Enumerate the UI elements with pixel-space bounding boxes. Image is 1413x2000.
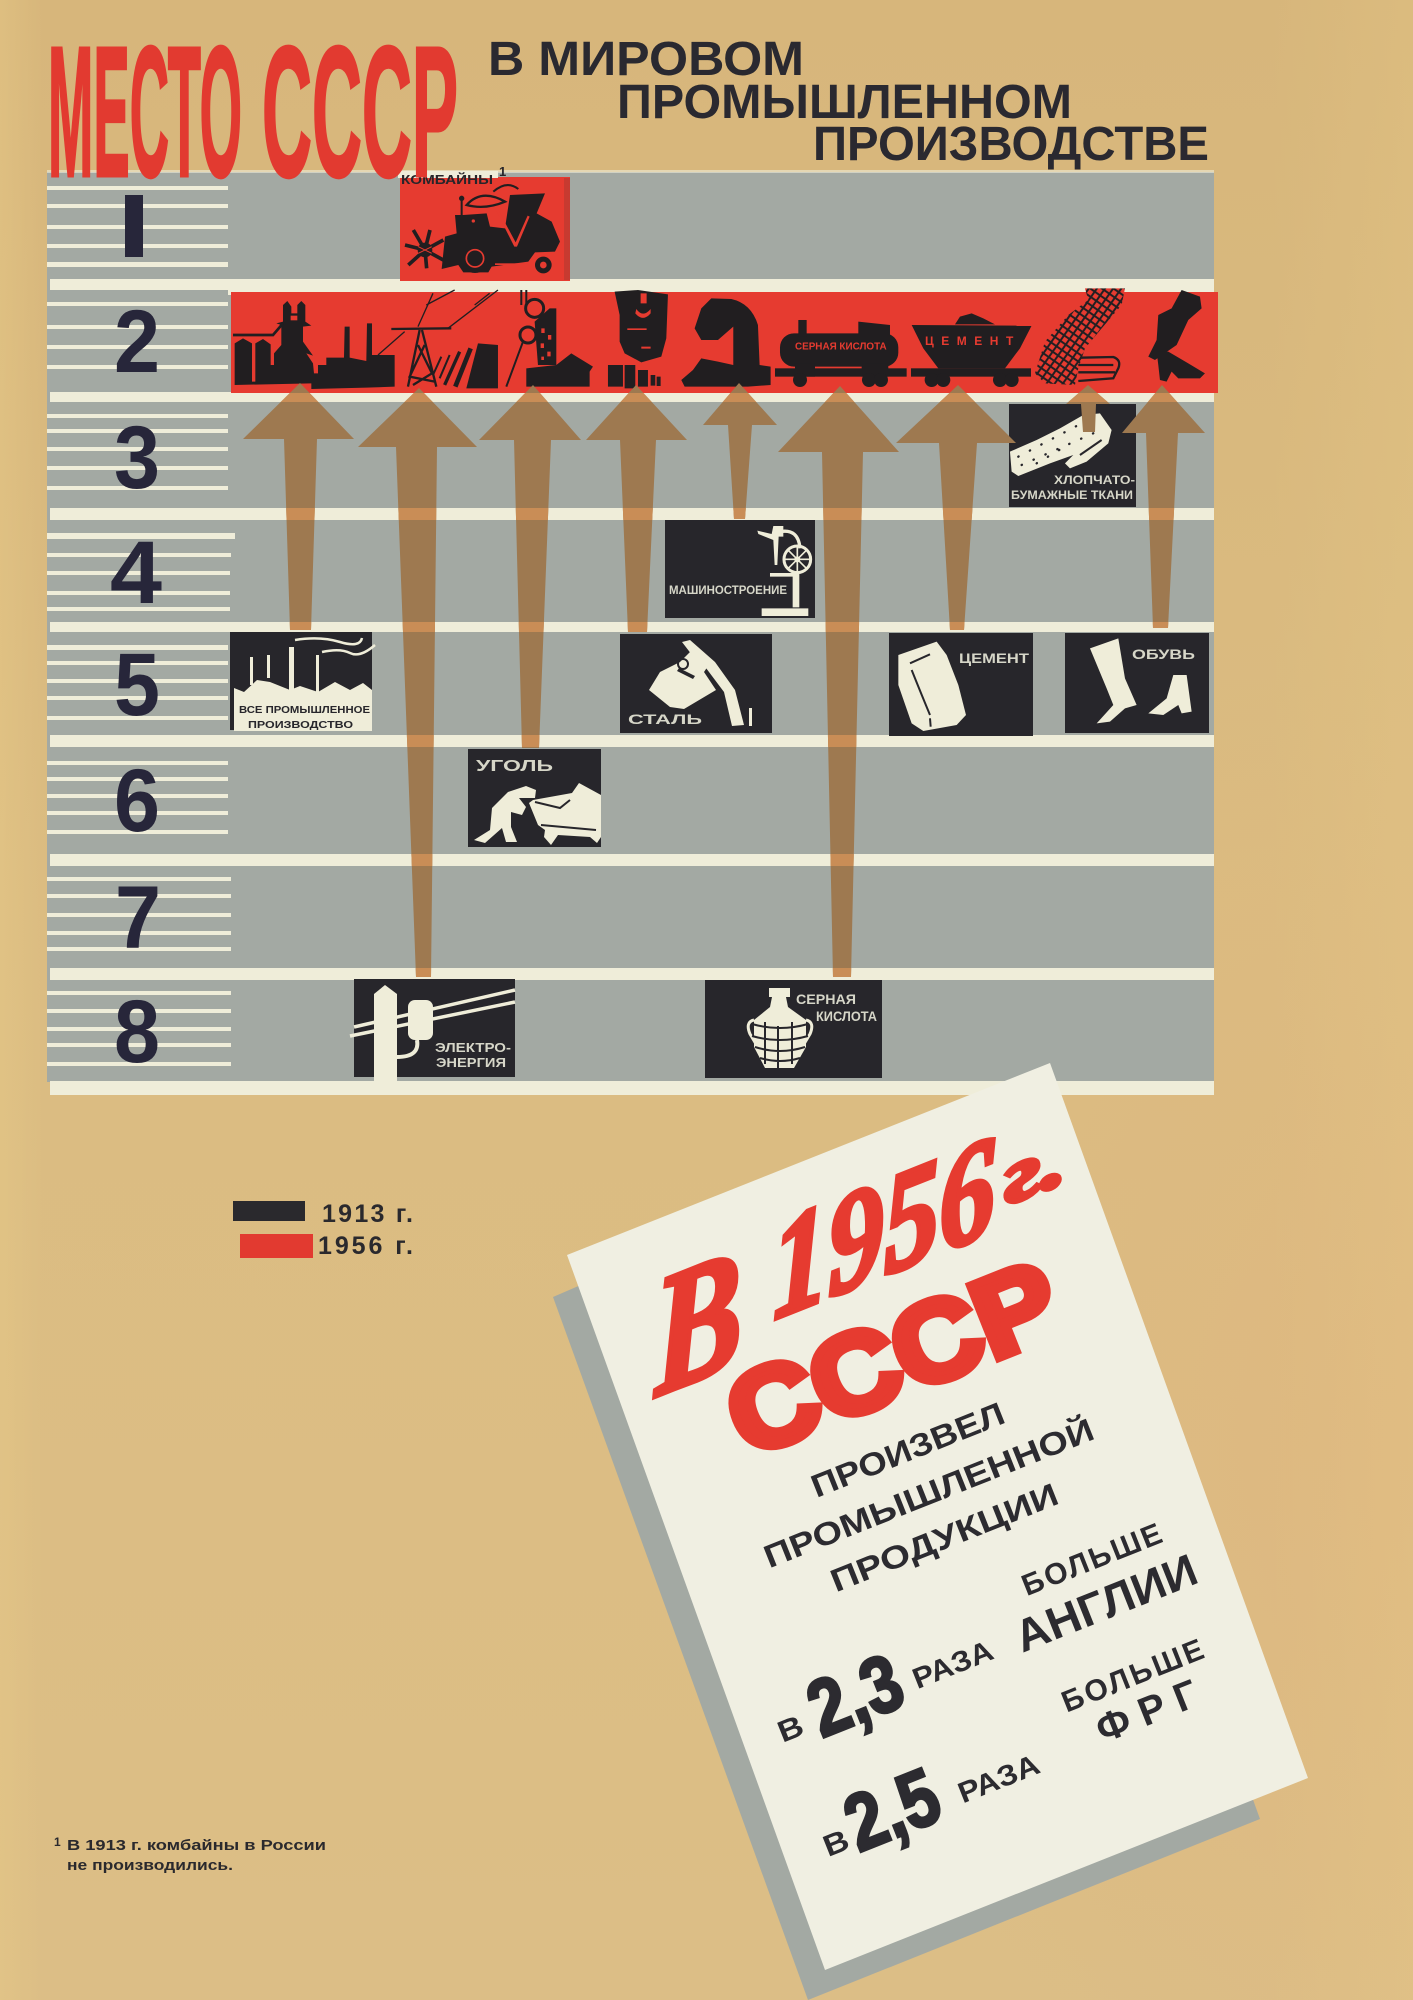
rank scale ticks bbox=[47, 186, 235, 1066]
body: produced industrial output: ПРОДУКЦИИ bbox=[825, 1476, 1063, 1599]
icon: factory and blast furnace bbox=[233, 301, 395, 389]
icon: cotton fabric bbox=[1010, 413, 1112, 476]
label: cotton fabrics bbox=[1011, 475, 1135, 502]
label: cotton fabrics: ХЛОПЧАТО- bbox=[1054, 475, 1135, 487]
icon: ladle pouring steel bbox=[649, 640, 752, 726]
footnote: В 1913 г. комбайны в России bbox=[67, 1838, 326, 1854]
icon: factory skyline bbox=[234, 638, 375, 731]
heading: in 1956 bbox=[588, 1085, 1110, 1434]
icon: cement hopper wagon bbox=[911, 313, 1032, 387]
chart panel bbox=[47, 164, 1218, 1095]
icon: boot and shoe bbox=[1090, 638, 1192, 723]
title: black part bbox=[488, 33, 1209, 171]
red band: rank 2 in 1956 bbox=[231, 288, 1218, 393]
icon: coal mine headframe bbox=[506, 290, 593, 387]
title: black part: ПРОМЫШЛЕННОМ bbox=[617, 76, 1072, 129]
horizontal row separators bbox=[47, 170, 1214, 1095]
arrow: footwear 5 to 2 bbox=[1122, 385, 1205, 628]
comparison: England: БОЛЬШЕ bbox=[1017, 1517, 1167, 1603]
footnote: 1 bbox=[54, 1835, 61, 1849]
rank numbers: 3 bbox=[114, 407, 160, 507]
label: coal: УГОЛЬ bbox=[476, 758, 553, 775]
icon: glass carboy bbox=[748, 988, 812, 1068]
label: all industry: ПРОИЗВОДСТВО bbox=[248, 719, 353, 731]
card text bbox=[588, 1085, 1288, 1881]
label: cotton fabrics: БУМАЖНЫЕ ТКАНИ bbox=[1011, 490, 1133, 502]
title: black part: ПРОИЗВОДСТВЕ bbox=[813, 118, 1209, 171]
chart grey field bbox=[47, 172, 1214, 1082]
box: steel, rank 5 bbox=[620, 634, 772, 733]
comparison: England bbox=[756, 1510, 1209, 1768]
comparison: West Germany: В bbox=[819, 1824, 854, 1864]
label: steel: СТАЛЬ bbox=[628, 711, 702, 727]
rank numbers bbox=[110, 195, 163, 1081]
arrow: coal 6 to 2 bbox=[479, 385, 581, 748]
comparison: West Germany bbox=[802, 1633, 1232, 1879]
legend: 1913: 1913 г. bbox=[322, 1200, 413, 1228]
rank numbers: 2 bbox=[114, 291, 160, 391]
icon: power pole and wires bbox=[350, 985, 515, 1095]
label: all industry bbox=[239, 704, 370, 731]
label: all industry: ВСЕ ПРОМЫШЛЕННОЕ bbox=[239, 704, 370, 716]
rank numbers: 6 bbox=[114, 750, 160, 850]
text on hopper: ЦЕМЕНТ bbox=[925, 334, 1014, 348]
body: produced industrial output bbox=[741, 1367, 1116, 1619]
footnote: не производились. bbox=[67, 1858, 233, 1874]
body: produced industrial output: ПРОИЗВЕЛ bbox=[806, 1395, 1010, 1504]
box: combines, rank 1 bbox=[398, 164, 570, 281]
title bbox=[48, 9, 1209, 216]
title: red part bbox=[48, 9, 458, 216]
label: footwear: ОБУВЬ bbox=[1132, 646, 1195, 662]
icon: power pylon and dam bbox=[378, 290, 498, 388]
comparison: West Germany: ФРГ bbox=[1090, 1672, 1204, 1752]
legend bbox=[233, 1200, 413, 1260]
label: electricity: ЭЛЕКТРО- bbox=[435, 1041, 511, 1055]
heading: in 1956: 1956 bbox=[770, 1105, 998, 1350]
title: red part: МЕСТО bbox=[48, 9, 242, 216]
label: electricity: ЭНЕРГИЯ bbox=[436, 1056, 506, 1070]
rank numbers: 4 bbox=[110, 522, 163, 622]
arrow: machine building 4 to 2 bbox=[703, 383, 777, 519]
footnote bbox=[54, 1835, 326, 1874]
card: 1956 comparison bbox=[553, 1063, 1308, 2000]
arrow: textiles 3 to 2 bbox=[1066, 385, 1110, 432]
icon: machine tool bbox=[681, 298, 771, 387]
icon: combine harvester bbox=[405, 185, 560, 273]
comparison: West Germany: РАЗА bbox=[954, 1749, 1044, 1810]
heading: in 1956: г. bbox=[996, 1116, 1070, 1220]
comparison: West Germany: БОЛЬШЕ bbox=[1057, 1633, 1209, 1719]
arrow: electricity 8 to 2 bbox=[358, 388, 477, 977]
comparison: England: РАЗА bbox=[908, 1635, 998, 1696]
heading: in 1956: В bbox=[649, 1210, 745, 1434]
box: cement, rank 5 bbox=[889, 633, 1033, 736]
box: footwear, rank 5 bbox=[1065, 633, 1209, 733]
label: sulphuric acid: КИСЛОТА bbox=[816, 1008, 877, 1024]
rank numbers: 5 bbox=[114, 634, 160, 734]
icon: sulphuric acid tank wagon bbox=[775, 320, 907, 387]
rank numbers: 8 bbox=[114, 981, 160, 1081]
comparison: West Germany: 2,5 bbox=[832, 1751, 952, 1868]
box: coal, rank 6 bbox=[468, 749, 601, 847]
icon: miner with cart bbox=[474, 783, 601, 845]
icon: textile roll bbox=[1035, 288, 1125, 385]
title: СССР bbox=[262, 9, 458, 216]
arrows: rank change 1913 to 1956 bbox=[243, 383, 1205, 977]
icon: machine tool bbox=[757, 526, 811, 616]
rank numbers: 7 bbox=[115, 867, 161, 967]
label: cement: ЦЕМЕНТ bbox=[959, 650, 1030, 666]
label: combines: КОМБАЙНЫ bbox=[401, 172, 493, 187]
arrow overlaps on white lines bbox=[243, 383, 1205, 977]
label: sulphuric acid: СЕРНАЯ bbox=[796, 991, 856, 1007]
arrow: all industry 5 to 2 bbox=[243, 383, 354, 630]
box: all industrial production, rank 5 bbox=[230, 632, 375, 731]
box: electricity, rank 8 bbox=[350, 979, 515, 1095]
title: black part: В МИРОВОМ bbox=[488, 33, 804, 86]
body: produced industrial output: ПРОМЫШЛЕННОЙ bbox=[759, 1411, 1099, 1575]
heading: USSR: СССР bbox=[709, 1237, 1076, 1480]
legend: 1956: 1956 г. bbox=[318, 1232, 413, 1260]
card shadow bbox=[553, 1103, 1260, 2000]
box: textiles, rank 3 bbox=[1009, 404, 1136, 507]
comparison: England: В bbox=[773, 1709, 808, 1749]
arrow: sulphuric acid 8 to 2 bbox=[778, 386, 899, 977]
label: machine building: МАШИНОСТРОЕНИЕ bbox=[669, 583, 787, 597]
legend: 1956 bbox=[240, 1232, 413, 1260]
icon: boot and shoe bbox=[1148, 290, 1205, 382]
box: sulphuric acid, rank 8 bbox=[705, 980, 882, 1078]
icon: locomotive bbox=[608, 290, 668, 388]
label: electricity bbox=[435, 1041, 511, 1070]
arrow: steel 5 to 2 bbox=[586, 385, 687, 632]
box: machine building, rank 4 bbox=[665, 520, 815, 618]
footnote mark: 1 bbox=[499, 164, 506, 179]
comparison: England: АНГЛИИ bbox=[1007, 1544, 1204, 1662]
icon: cement sack bbox=[898, 642, 966, 731]
arrow: cement 5 to 2 bbox=[896, 385, 1016, 630]
comparison: England: 2,3 bbox=[795, 1636, 915, 1754]
text on tank: СЕРНАЯ КИСЛОТА bbox=[795, 342, 887, 353]
legend: 1913 bbox=[233, 1200, 413, 1228]
label: sulphuric acid bbox=[796, 991, 877, 1024]
card sheet bbox=[567, 1063, 1308, 1970]
